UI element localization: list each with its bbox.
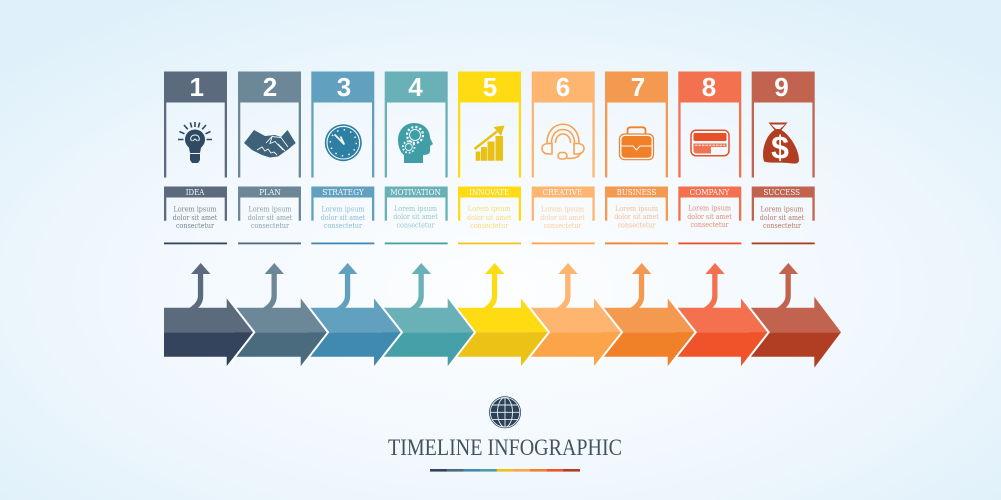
description 8: Lorem ipsum [688,204,731,212]
step 1: idea card [164,72,227,244]
number 6: 6 [556,72,570,102]
description 2: dolor sit amet [248,213,292,222]
icon: money bag [763,122,799,166]
number 2: 2 [263,72,277,102]
description 9: consectetur [763,221,801,230]
title underline [430,469,580,472]
label: motivation: MOTIVATION [390,188,441,197]
description 5: Lorem ipsum [468,204,511,213]
description 4: dolor sit amet [393,212,438,221]
step 3: strategy card [311,72,374,244]
description 2: consectetur [251,221,289,230]
step 5: innovate card [458,72,521,244]
number 9: 9 [774,72,789,102]
icon: money bag: $ [771,130,789,166]
icon: light bulb [178,122,212,163]
number 4: 4 [408,72,423,102]
icon: briefcase [620,127,654,160]
description 6: Lorem ipsum [541,204,584,214]
arrow 5 [456,263,549,368]
label: strategy: STRATEGY [322,188,364,197]
arrow 7 [602,263,696,368]
label: business: BUSINESS [617,188,656,197]
description 5: consectetur [470,221,509,230]
description 7: consectetur [618,220,656,230]
description 4: Lorem ipsum [394,204,437,213]
number 3: 3 [337,72,351,102]
icon: growth chart [474,126,504,161]
step 7: business card [605,72,668,244]
description 9: Lorem ipsum [760,204,804,214]
description 7: dolor sit amet [614,212,659,221]
step 4: motivation card [385,72,448,244]
step 8: company card [678,72,741,244]
description 3: dolor sit amet [321,213,365,222]
icon: clock [325,124,362,161]
label: idea: IDEA [186,188,204,197]
icon: head with gears [398,123,433,163]
arrow 4 [382,263,475,368]
number 1: 1 [189,72,204,102]
icon: headset [542,124,584,159]
description 1: consectetur [176,221,214,230]
label: success: SUCCESS [763,188,800,197]
description 1: Lorem ipsum [174,204,217,214]
label: innovate: INNOVATE [469,188,509,197]
step 9: success card [752,72,815,244]
description 5: dolor sit amet [467,213,512,222]
step 6: creative card [532,72,595,244]
description 1: dolor sit amet [173,213,217,222]
description 4: consectetur [396,220,435,230]
description 2: Lorem ipsum [248,204,292,214]
description 9: dolor sit amet [760,213,804,222]
description 3: Lorem ipsum [322,204,365,214]
description 3: consectetur [324,221,362,230]
number 5: 5 [483,72,497,102]
number 7: 7 [631,72,645,102]
description 7: Lorem ipsum [615,204,658,213]
description 8: consectetur [690,220,729,229]
icon: globe [489,396,521,428]
arrow 9 [749,263,841,368]
arrow 1 [164,263,254,368]
arrow 3 [308,263,402,368]
label: plan: PLAN [259,188,281,197]
label: creative: CREATIVE [543,188,582,197]
title: TIMELINE INFOGRAPHIC [388,435,622,460]
description 8: dolor sit amet [687,212,732,221]
arrow 8 [676,263,769,368]
arrow 2 [235,263,328,368]
icon: handshake [244,130,296,158]
description 6: dolor sit amet [540,213,585,222]
arrow 6 [529,263,622,368]
step 2: plan card [238,72,301,244]
number 8: 8 [702,72,716,102]
label: company: COMPANY [690,188,730,197]
icon: credit card [691,130,729,156]
description 6: consectetur [544,221,582,230]
